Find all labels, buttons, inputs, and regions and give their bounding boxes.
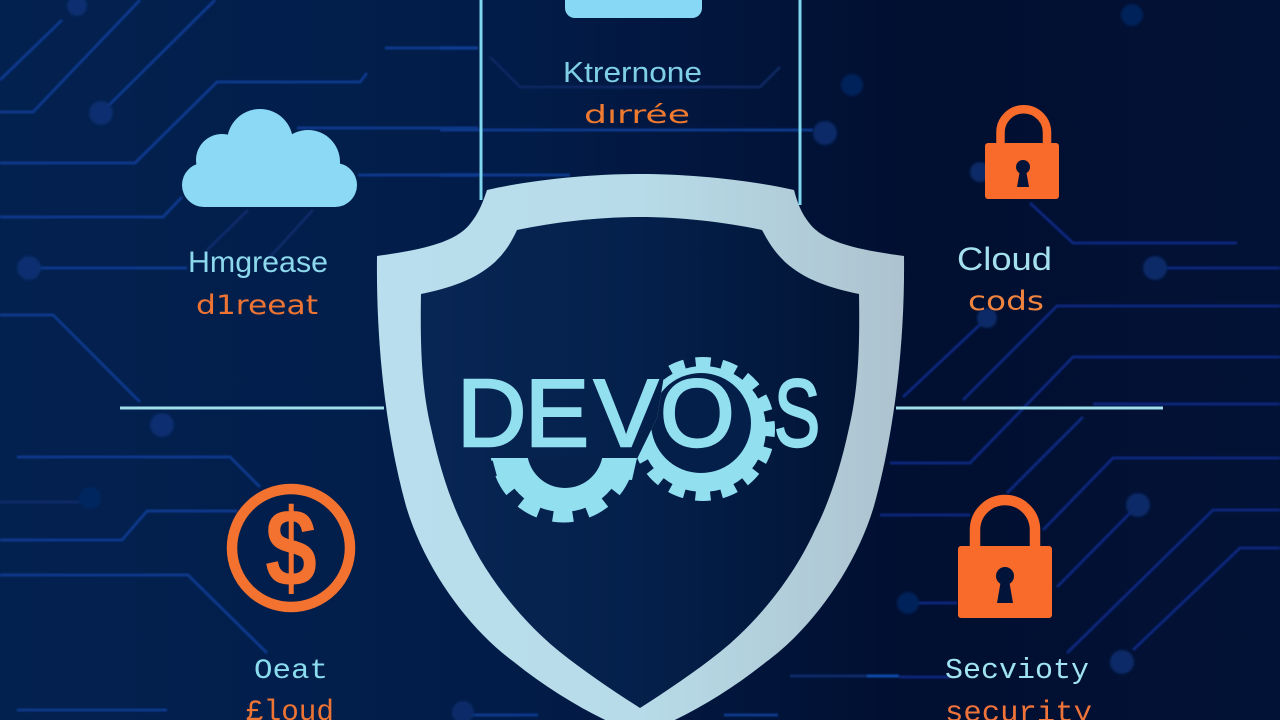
circuit nodes: left side — [17, 0, 174, 509]
label: cloud cods — [957, 241, 1052, 317]
label: security — [945, 654, 1092, 720]
icon: dollar coin: $ — [265, 487, 317, 610]
label: cloud: Hmgrease — [188, 246, 328, 279]
logo wordmark: DEVO — [457, 360, 735, 467]
top panel: frame and tab — [480, 0, 802, 205]
label: top card: Ktrernone — [563, 57, 702, 89]
icon: dollar coin — [232, 487, 350, 610]
label: cost: Oeat — [254, 656, 328, 687]
label: security: Secvioty — [945, 654, 1089, 687]
connector line: right — [896, 406, 1163, 410]
circuit traces: centre — [440, 48, 899, 715]
label: cloud — [188, 246, 328, 321]
icon: padlock, upper right — [985, 109, 1059, 199]
logo: gear, right — [629, 355, 777, 503]
shield — [377, 174, 904, 720]
label: top card: dırrée — [584, 100, 690, 129]
label: cloud cods: cods — [968, 286, 1044, 317]
circuit nodes: right side and top — [452, 4, 1167, 720]
icon: padlock, lower right — [958, 500, 1052, 618]
label: cloud cods: Cloud — [957, 241, 1052, 277]
label: top card — [563, 57, 702, 129]
label: cost — [246, 656, 334, 720]
logo wordmark: S — [774, 359, 820, 467]
connector line: left — [120, 406, 384, 410]
label: cloud: d1reeat — [196, 290, 318, 321]
circuit traces: left side — [0, 0, 478, 710]
circuit traces: right side — [880, 203, 1280, 677]
logo: gear, left half — [491, 458, 637, 522]
icon: cloud — [182, 109, 357, 207]
